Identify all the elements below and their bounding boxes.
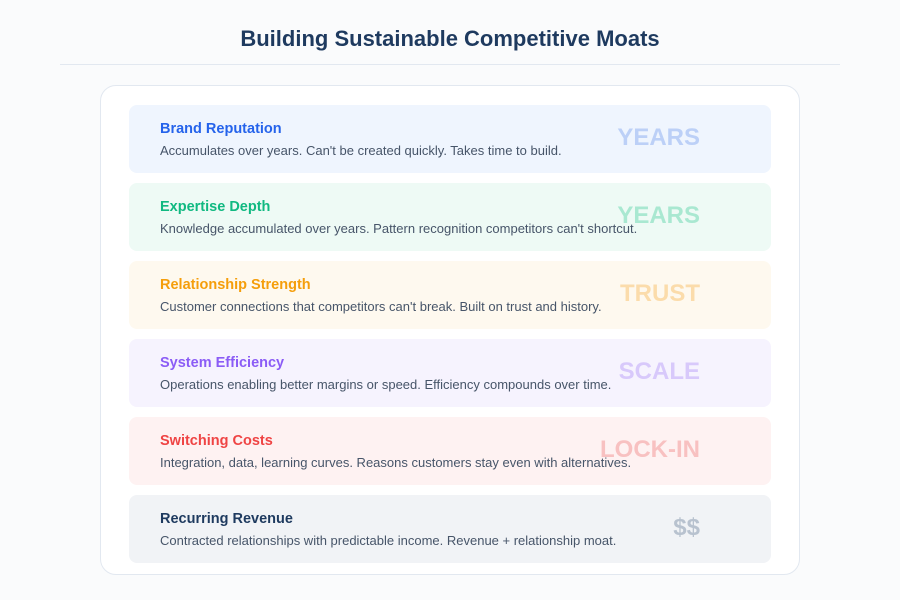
row: system efficiency: Operations enabling better margins or speed. Efficiency compounds over time.: [160, 377, 611, 392]
row: recurring revenue: Recurring Revenue: [160, 511, 293, 527]
row: switching costs: Switching Costs: [160, 433, 273, 449]
row: relationship strength: [129, 261, 771, 329]
row: recurring revenue: [129, 495, 771, 563]
row: relationship strength: Customer connections that competitors can't break. Built on trust and history.: [160, 299, 602, 314]
row: relationship strength: Relationship Strength: [160, 277, 311, 293]
row: recurring revenue: Contracted relationships with predictable income. Revenue + relationship moat.: [160, 533, 616, 548]
row: switching costs: LOCK-IN: [600, 436, 700, 463]
row: expertise depth: Knowledge accumulated over years. Pattern recognition competitors can't shortcut.: [160, 221, 637, 236]
row: expertise depth: YEARS: [617, 202, 700, 229]
row: system efficiency: [129, 339, 771, 407]
row: system efficiency: System Efficiency: [160, 355, 284, 371]
row: system efficiency: SCALE: [619, 358, 700, 385]
row: switching costs: Integration, data, learning curves. Reasons customers stay even with alternatives.: [160, 455, 631, 470]
row: brand reputation: Accumulates over years. Can't be created quickly. Takes time to build.: [160, 143, 562, 158]
row: recurring revenue: $$: [673, 514, 700, 541]
row: brand reputation: [129, 105, 771, 173]
row: brand reputation: YEARS: [617, 124, 700, 151]
row: relationship strength: TRUST: [620, 280, 700, 307]
row: expertise depth: [129, 183, 771, 251]
row: brand reputation: Brand Reputation: [160, 121, 282, 137]
panel: moats card: [100, 85, 800, 575]
row: expertise depth: Expertise Depth: [160, 199, 270, 215]
title: Building Sustainable Competitive Moats: [240, 26, 660, 51]
row: switching costs: [129, 417, 771, 485]
